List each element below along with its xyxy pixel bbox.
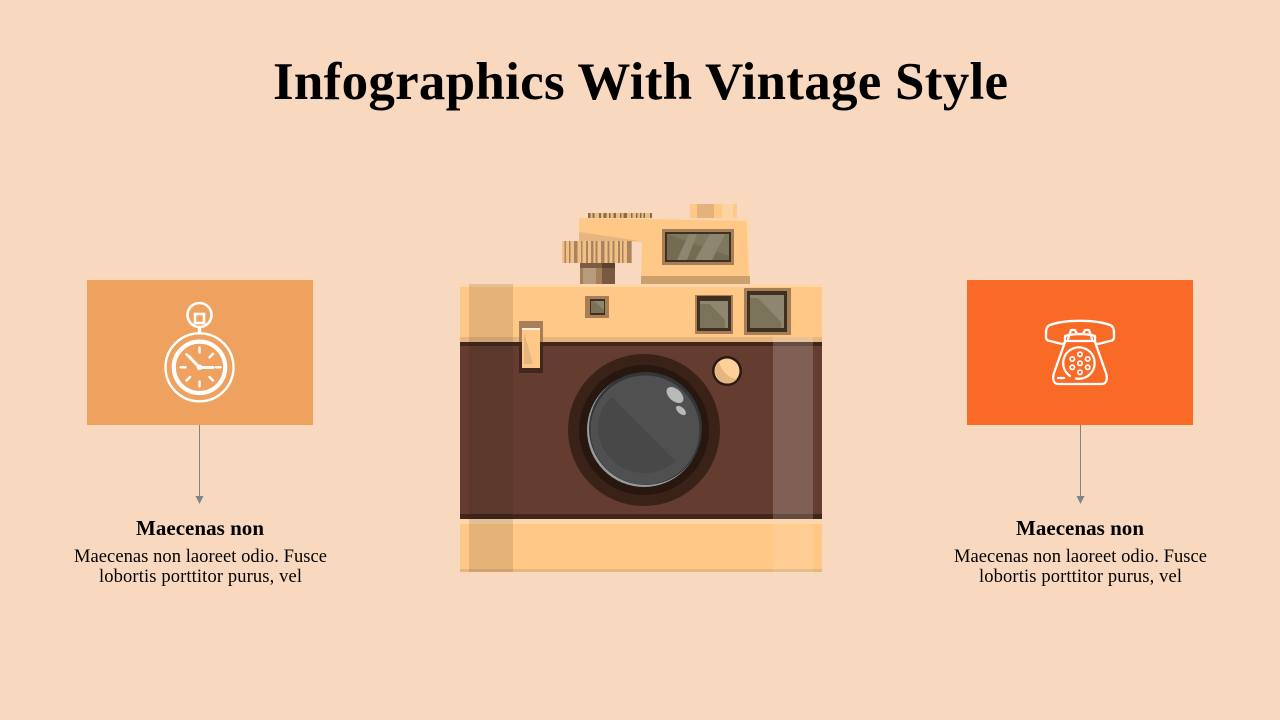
icon: telephone <box>1046 321 1114 384</box>
text block: left: Maecenas non <box>136 516 264 540</box>
camera dial <box>562 241 632 284</box>
camera middle window <box>695 295 733 334</box>
text block: left: Maecenas non laoreet odio. Fusce <box>74 547 327 567</box>
panel: left stopwatch card <box>87 280 313 425</box>
text block: left: lobortis porttitor purus, vel <box>99 567 302 587</box>
camera lens <box>568 354 720 506</box>
text block: right: Maecenas non laoreet odio. Fusce <box>954 547 1207 567</box>
camera shutter button <box>712 356 742 386</box>
arrow: left card to text <box>196 425 204 504</box>
camera small window <box>585 296 609 318</box>
title: Infographics With Vintage Style <box>273 53 1008 111</box>
camera body leather <box>460 342 822 519</box>
text block: right: Maecenas non <box>1016 516 1144 540</box>
text block: right <box>954 516 1207 587</box>
camera body top plate <box>460 284 822 342</box>
text block: left <box>74 516 327 587</box>
text block: right: lobortis porttitor purus, vel <box>979 567 1182 587</box>
camera large window <box>744 288 791 335</box>
camera bottom plate <box>460 519 822 572</box>
arrow: right card to text <box>1076 425 1084 504</box>
camera top button <box>690 204 737 218</box>
panel: right telephone card <box>967 280 1193 425</box>
camera viewfinder housing <box>579 218 750 284</box>
icon: stopwatch <box>166 303 234 401</box>
camera illustration <box>460 204 822 572</box>
camera shade stripes <box>469 284 813 572</box>
camera top knurl <box>588 213 652 218</box>
camera slider <box>519 321 543 373</box>
